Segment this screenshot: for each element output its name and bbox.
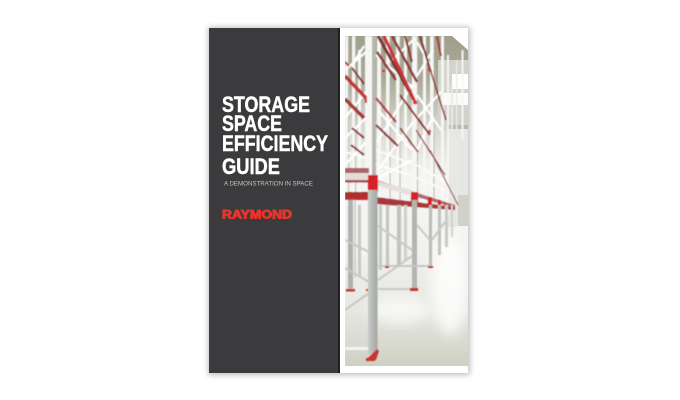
panel: dark title band [209, 28, 340, 373]
panel: white cover page [209, 28, 468, 373]
rack uprights: white and grey pairs [345, 36, 464, 215]
lower floor braces [345, 222, 445, 310]
background: warehouse ceiling and wall [345, 36, 468, 262]
red joints on posts [365, 68, 431, 133]
title: Storage Space Efficiency Guide: SPACE [222, 111, 282, 136]
logo: Raymond wordmark: RAYMOND [222, 210, 292, 222]
red footplates [346, 266, 433, 292]
title: Storage Space Efficiency Guide: STORAGE [222, 92, 310, 117]
lower rack uprights [348, 200, 453, 290]
foreground floor rail [345, 347, 368, 350]
red rack beams [345, 36, 458, 205]
white horizontal lattice on lower racks [345, 150, 445, 190]
subtitle: A DEMONSTRATION IN SPACE [224, 180, 313, 188]
lower red beams [345, 168, 455, 210]
infographic: brochure cover on white background [205, 24, 473, 378]
title: Storage Space Efficiency Guide: EFFICIENCY [222, 131, 328, 156]
title: Storage Space Efficiency Guide: GUIDE [222, 154, 280, 179]
far faint uprights [451, 60, 458, 215]
title: Storage Space Efficiency Guide [222, 92, 328, 179]
photo: warehouse racking [345, 36, 468, 366]
floor [345, 226, 468, 366]
main foreground upright [366, 190, 379, 361]
upper rack cross braces [345, 40, 441, 178]
page shadow [208, 27, 470, 375]
